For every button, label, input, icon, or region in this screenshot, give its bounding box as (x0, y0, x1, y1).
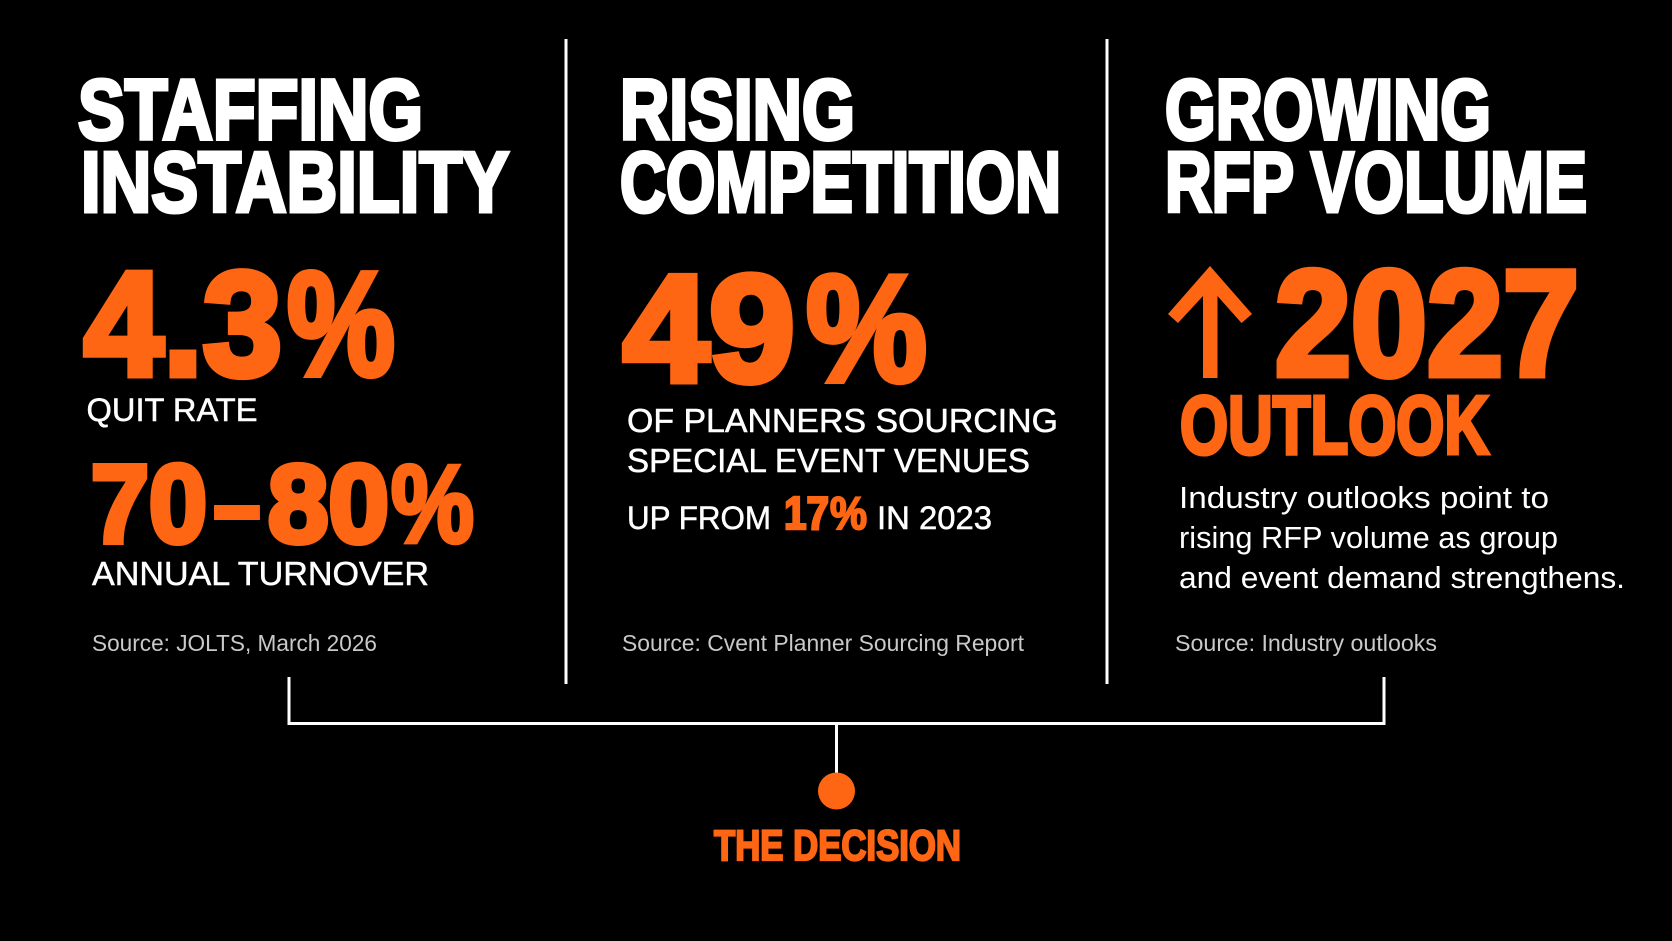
description: planners sourcing (627, 402, 1058, 479)
description: industry outlooks (1179, 480, 1625, 595)
comparison: up from 17% in 2023: % (830, 487, 867, 539)
description: planners sourcing: OF PLANNERS SOURCING (627, 402, 1058, 439)
stat: 49%: 49 (623, 244, 795, 414)
description: industry outlooks: rising RFP volume as group (1179, 520, 1558, 555)
comparison: up from 17% in 2023 (627, 487, 992, 539)
stat: 49% (623, 244, 927, 414)
label: annual turnover: ANNUAL TURNOVER (92, 555, 429, 592)
source: JOLTS: Source: JOLTS, March 2026 (92, 630, 377, 656)
description: industry outlooks: and event demand strengthens. (1179, 560, 1625, 595)
heading: growing RFP volume: GROWING (1165, 63, 1491, 158)
description: industry outlooks: Industry outlooks point to (1179, 480, 1549, 515)
panel: staffing instability (78, 63, 509, 656)
icon: up arrow (1168, 266, 1252, 378)
heading: staffing instability (78, 63, 509, 230)
comparison: up from 17% in 2023: 17 (784, 487, 829, 539)
heading: growing RFP volume (1165, 63, 1587, 230)
heading: rising competition: COMPETITION (620, 136, 1061, 230)
stat: 2027: 2027 (1275, 239, 1579, 407)
stat: 70–80% (91, 443, 474, 566)
stat: 70–80%: % (391, 443, 474, 566)
heading: staffing instability: INSTABILITY (81, 136, 509, 230)
source: industry outlooks: Source: Industry outlooks (1175, 630, 1437, 656)
stat: 4.3%: 4.3 (84, 242, 282, 407)
divider left (564, 39, 568, 684)
stat: 49%: % (806, 244, 927, 414)
comparison: up from 17% in 2023: IN 2023 (877, 500, 992, 536)
label: quit rate: QUIT RATE (86, 392, 258, 428)
label: the decision: THE DECISION (714, 822, 961, 870)
bracket connector (289, 677, 1384, 775)
node: decision dot (818, 772, 855, 810)
stat: 4.3% (84, 242, 395, 407)
description: planners sourcing: SPECIAL EVENT VENUES (627, 442, 1030, 479)
panel: rising competition (620, 63, 1061, 656)
panel: growing RFP volume (1165, 63, 1625, 656)
stat: 70–80%: 80 (268, 443, 389, 566)
stat: 70–80%: 70 (91, 443, 207, 566)
divider right (1106, 39, 1108, 684)
heading: rising competition: RISING (620, 63, 855, 158)
comparison: up from 17% in 2023: UP FROM (627, 500, 771, 536)
stat: 4.3%: % (287, 242, 395, 407)
stat label: outlook: OUTLOOK (1180, 378, 1489, 472)
heading: staffing instability: STAFFING (78, 63, 423, 158)
source: Cvent: Source: Cvent Planner Sourcing Report (622, 630, 1025, 656)
stat: 70–80%: – (213, 443, 261, 566)
heading: rising competition (620, 63, 1061, 230)
